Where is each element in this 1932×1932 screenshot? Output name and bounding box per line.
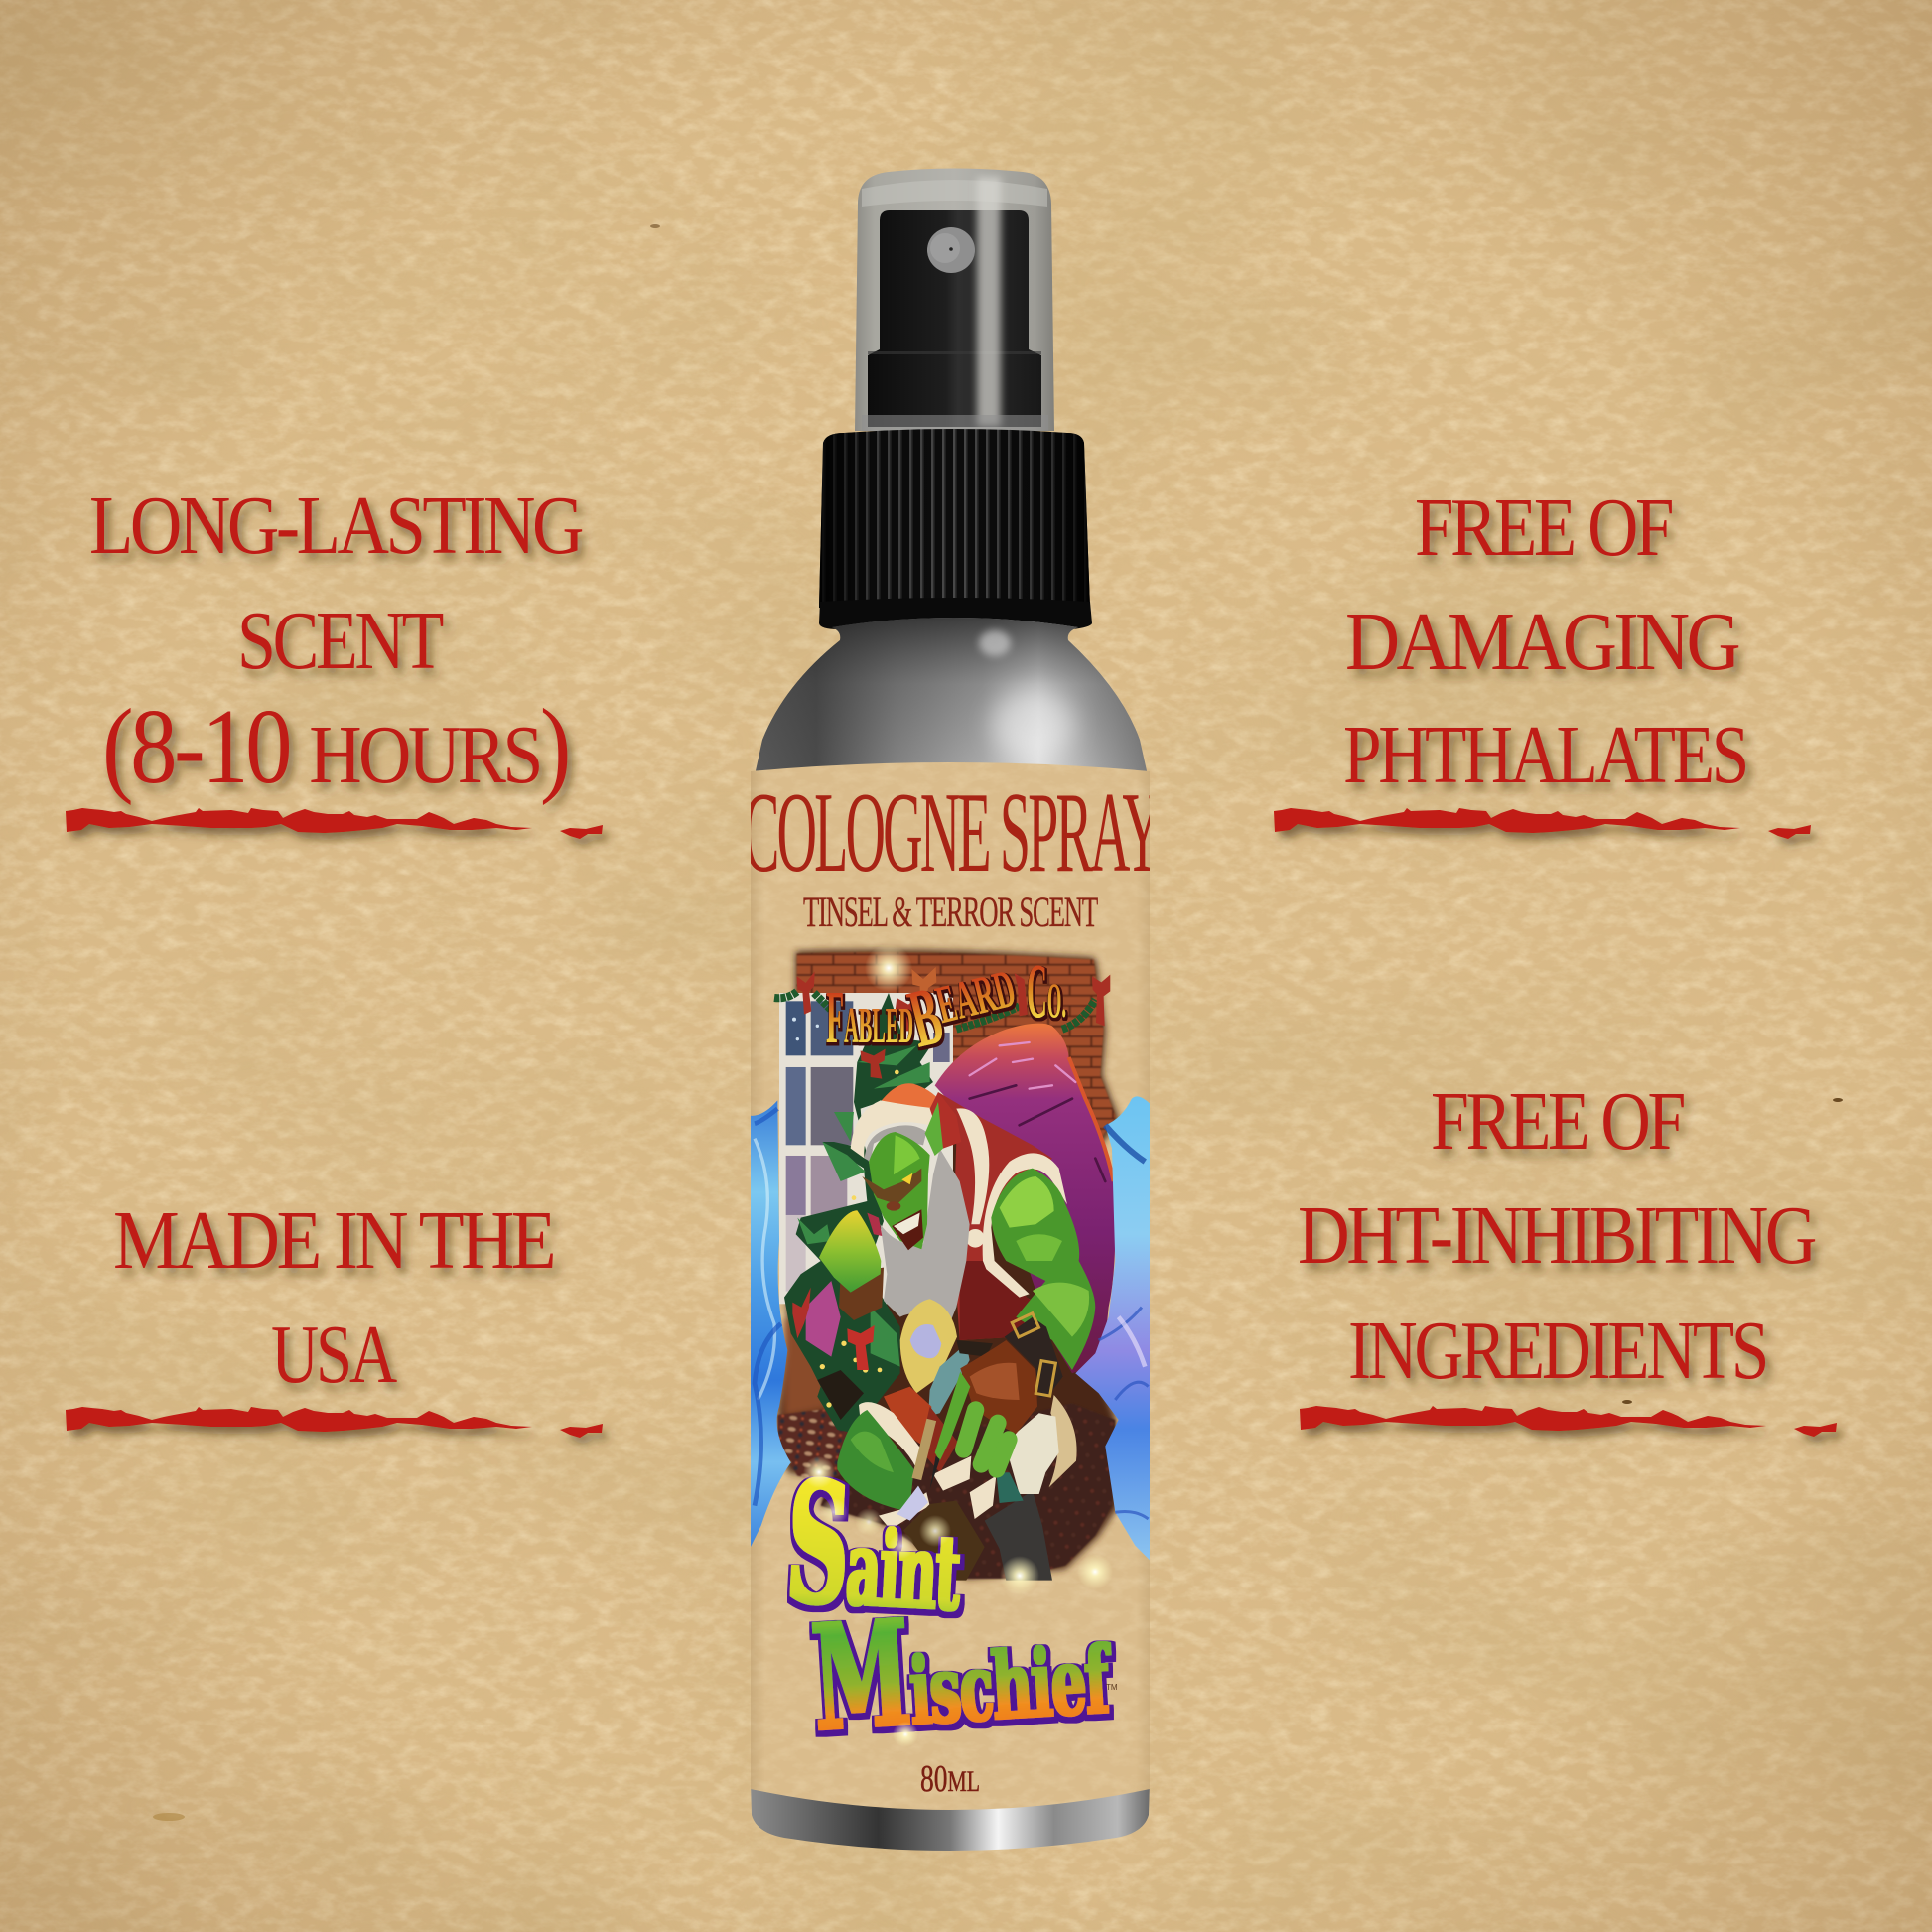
boot: [985, 1491, 1052, 1581]
brand logo: fabled beard co: CO.: [1027, 947, 1066, 1034]
trousers: [903, 1501, 985, 1581]
trademark: TM: [1106, 1683, 1118, 1692]
callout: long-lasting scent: SCENT: [237, 595, 443, 687]
label illustration: goblin santa: [748, 950, 1152, 1581]
callout: free of DHT-inhibiting ingredients: INGREDIENTS: [1348, 1305, 1766, 1397]
callout: free of DHT-inhibiting ingredients: DHT-INHIBITING: [1298, 1189, 1816, 1282]
product name logo: saint mischief: Mischief: [808, 1577, 1116, 1764]
brand logo: fabled beard co: B: [900, 969, 951, 1065]
label subheading: scent name: TINSEL & TERROR SCENT: [803, 890, 1098, 936]
brand logo: fabled beard co: [826, 947, 1066, 1065]
window: [779, 993, 953, 1304]
santa coat: [938, 1092, 1067, 1340]
doll: [900, 1299, 970, 1417]
goblin face: [862, 1102, 943, 1250]
callout: made in the USA: MADE IN THE: [113, 1194, 554, 1287]
callout: free of damaging phthalates: FREE OF: [1415, 482, 1672, 574]
sparkles: [803, 944, 1113, 1747]
text: COLOGNE SPRAY: [743, 769, 1162, 897]
goblin fingers: [930, 1372, 1009, 1489]
spray nozzle: [927, 227, 975, 273]
callout: made in the USA: [66, 1194, 603, 1438]
callout: long-lasting scent: LONG-LASTING: [89, 480, 583, 572]
doll limbs: [897, 1420, 931, 1521]
callout: free of damaging phthalates: DAMAGING: [1345, 596, 1739, 688]
glove cuff and buckles: [960, 1313, 1063, 1434]
brick wall: [797, 952, 1116, 1142]
goblin fist with purple cloth: [806, 1210, 884, 1357]
metal base of bottle: [751, 1782, 1150, 1851]
muscular arm: [991, 1169, 1095, 1370]
goblin beard: [881, 1149, 970, 1323]
callout: long-lasting scent: (8-10 HOURS): [102, 688, 568, 806]
rug: [777, 1403, 1115, 1579]
paper label: [745, 750, 1157, 1837]
santa hat: [851, 1083, 961, 1159]
callout: free of DHT-inhibiting ingredients: FREE OF: [1431, 1075, 1684, 1168]
brand logo: fabled beard co: FABLED: [826, 976, 913, 1059]
product bottle: [743, 169, 1162, 1851]
callout: free of damaging phthalates: [1274, 482, 1811, 839]
callout: made in the USA: USA: [271, 1309, 397, 1401]
christmas tree: [784, 993, 933, 1433]
bows and garland: [774, 967, 1110, 1370]
brand logo: fabled beard co: EARD: [930, 958, 1021, 1035]
product name logo: saint mischief: [782, 1444, 1116, 1764]
fur coat tail and papers: [996, 1395, 1077, 1503]
product name logo: saint mischief: Saint: [782, 1444, 967, 1649]
purple sack: [935, 1024, 1115, 1373]
aluminium shoulder and body: [753, 618, 1150, 784]
callout: free of damaging phthalates: PHTHALATES: [1343, 709, 1746, 801]
callout: long-lasting scent: [66, 480, 603, 839]
ribbed black collar: [819, 429, 1092, 629]
volume: 80ml: 80ML: [920, 1758, 980, 1800]
clear overcap: [855, 169, 1054, 431]
dark room backdrop: [777, 950, 1119, 1579]
belt: [956, 1340, 993, 1357]
blue smoke left: [748, 1100, 791, 1552]
blue smoke right: [1075, 1096, 1152, 1562]
sleeve, knee and fur: [837, 1387, 996, 1530]
black spray actuator: [862, 177, 1048, 431]
callout: free of DHT-inhibiting ingredients: [1298, 1075, 1837, 1437]
